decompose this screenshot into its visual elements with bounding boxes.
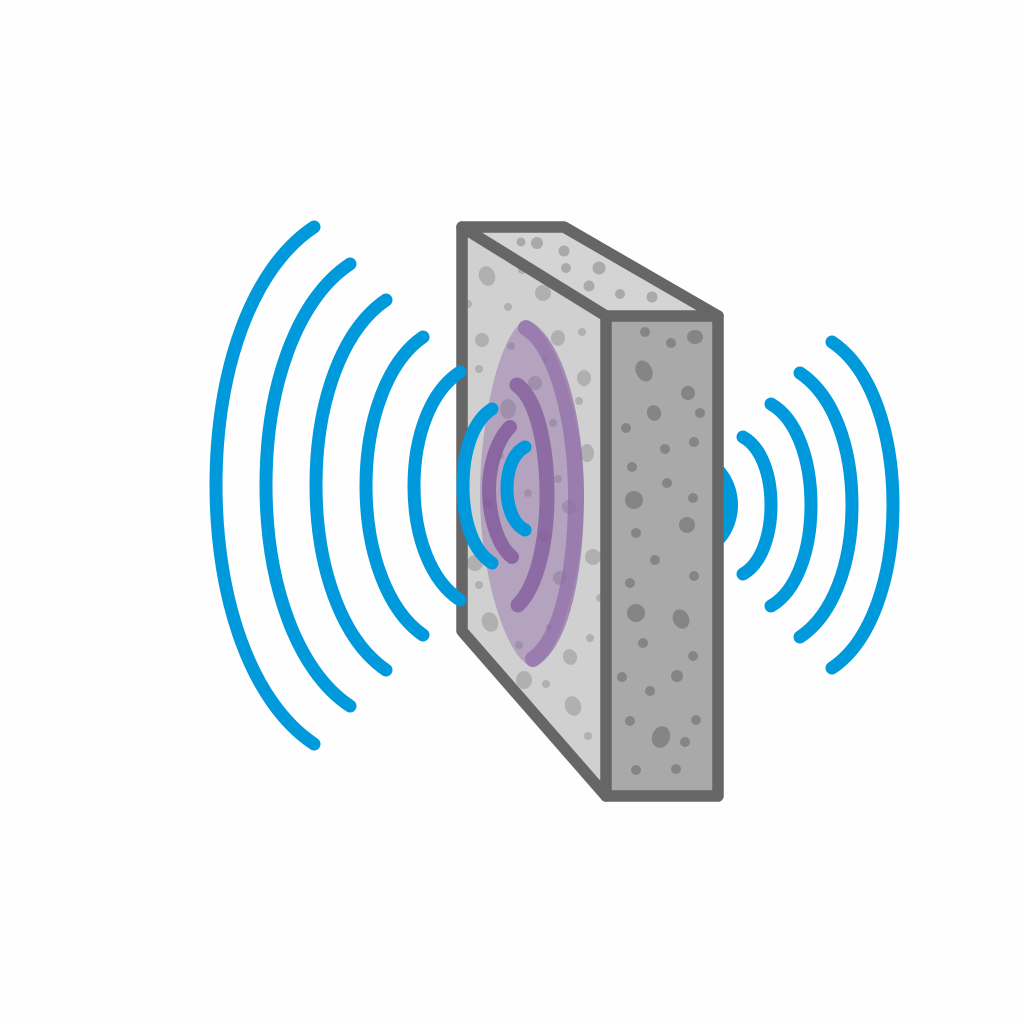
speckles: side face (617, 327, 705, 775)
speckles: top face (516, 237, 658, 302)
wall front face (462, 227, 606, 796)
purple absorption zone (480, 320, 584, 667)
purple absorbed wave: outer (526, 328, 576, 659)
wall side face (606, 316, 718, 796)
incoming sound waves (left) (216, 227, 525, 744)
transmitted sound waves (right) (743, 342, 893, 668)
purple absorbed wave: inner (489, 427, 512, 557)
transmitted wave emerging behind the wall edge (722, 465, 738, 545)
purple absorbed wave: middle (517, 385, 547, 605)
wall outlines (462, 227, 718, 796)
speckles: front face (464, 264, 604, 740)
wall top face (462, 227, 718, 316)
absorption ellipse (480, 320, 584, 667)
